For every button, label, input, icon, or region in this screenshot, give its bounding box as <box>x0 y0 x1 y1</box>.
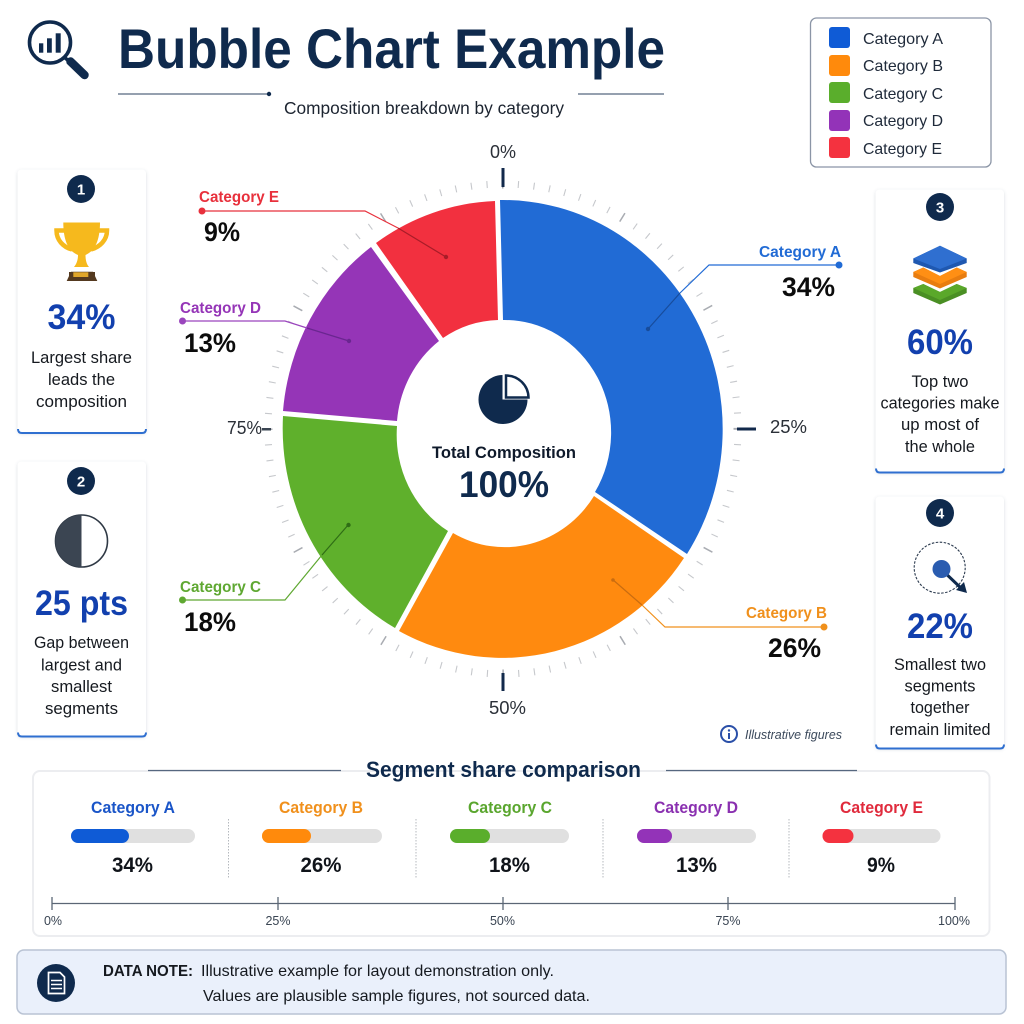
center label: 100% <box>459 464 549 505</box>
illustrative figures note: Illustrative figures <box>745 728 842 742</box>
stat 34%: 34% <box>48 298 116 337</box>
callout: category E <box>198 189 448 259</box>
panel: segment share comparison <box>33 757 990 936</box>
icon: target dot with arrow <box>914 542 967 593</box>
bar: category B: Category B <box>279 799 363 817</box>
callout: category A <box>646 244 842 331</box>
badge 1: 1 <box>77 182 85 198</box>
scale labels: 25% <box>770 417 807 437</box>
description: leads the <box>48 370 115 389</box>
legend: Category B <box>863 58 943 75</box>
description: segments <box>904 676 976 696</box>
description: segments <box>45 699 118 718</box>
segment E 9% <box>376 201 498 338</box>
heading: Segment share comparison <box>366 757 641 782</box>
bar: category E: Category E <box>840 799 923 817</box>
panel: card 1 largest share <box>18 170 146 433</box>
panel: card 4 smallest two <box>876 496 1004 748</box>
icon: document <box>37 964 75 1002</box>
description: categories make <box>880 394 1000 412</box>
callout: category D: Category D <box>180 300 261 317</box>
note text: DATA NOTE: <box>103 963 193 980</box>
orange layer <box>913 268 967 288</box>
bar: category D <box>637 799 756 877</box>
scale labels: 0% <box>490 142 516 162</box>
icon: half circle <box>56 515 108 567</box>
axis 0 to 100%: 25% <box>265 914 291 928</box>
axis 0 to 100% <box>44 897 970 928</box>
description <box>880 372 1000 456</box>
callout: category C <box>179 523 351 637</box>
icon: magnifier with bars <box>30 22 84 75</box>
stat 25 pts: 25 pts <box>35 584 128 623</box>
icon: stacked layers <box>913 246 967 304</box>
description: Smallest two <box>894 655 986 674</box>
icon: pie chart <box>478 375 528 424</box>
callout: category A: Category A <box>759 244 841 261</box>
bar: category E <box>822 799 940 877</box>
note text: Illustrative example for layout demonstration only. <box>201 963 554 980</box>
bar: category C <box>450 799 569 877</box>
subtitle: Composition breakdown by category <box>284 98 564 118</box>
axis 0 to 100%: 75% <box>715 914 741 928</box>
description <box>34 633 129 718</box>
scale labels: 75% <box>227 418 262 438</box>
badge 4: 4 <box>936 506 945 522</box>
callout: category C: Category C <box>180 579 261 596</box>
legend <box>810 18 991 167</box>
bar: category E: 9% <box>867 854 895 877</box>
legend: Category C <box>863 86 943 103</box>
description: the whole <box>905 437 975 456</box>
description: Largest share <box>31 348 132 367</box>
callout: category E: Category E <box>199 189 279 206</box>
segment C 18% <box>283 416 448 628</box>
description: composition <box>36 392 127 411</box>
description: up most of <box>901 415 979 434</box>
description: remain limited <box>890 720 990 739</box>
legend: Category E <box>863 141 942 158</box>
badge 1 <box>67 175 95 203</box>
green layer <box>913 284 967 304</box>
badge 2 <box>67 467 95 495</box>
bar: category A: 34% <box>112 854 153 877</box>
bar: category B: 26% <box>300 854 342 877</box>
panel: card 3 top two <box>876 190 1004 472</box>
description <box>890 655 990 739</box>
bar: category D: Category D <box>654 799 738 817</box>
bar: category D: 13% <box>676 854 717 877</box>
chart: gauge tick ring <box>262 168 756 691</box>
badge 4 <box>926 499 954 527</box>
icon: trophy <box>56 222 107 281</box>
axis 0 to 100%: 0% <box>44 914 62 928</box>
badge 3: 3 <box>936 200 944 216</box>
callout: category D: 13% <box>184 328 236 358</box>
description <box>31 348 132 411</box>
callout: category B: 26% <box>768 633 821 663</box>
badge 3 <box>926 193 954 221</box>
segment A 34% <box>500 200 723 554</box>
axis 0 to 100%: 100% <box>938 914 970 928</box>
title: Bubble Chart Example <box>118 17 665 80</box>
callout: category B: Category B <box>746 605 827 622</box>
chart: donut <box>283 200 723 658</box>
scale labels <box>227 142 807 718</box>
panel: data note <box>17 950 1006 1014</box>
legend: Category A <box>863 31 943 48</box>
bar: category A <box>71 799 195 877</box>
description: largest and <box>41 656 122 674</box>
bar: category C: 18% <box>489 854 530 877</box>
segment D 13% <box>283 247 439 421</box>
note text: Values are plausible sample figures, not sourced data. <box>203 988 590 1005</box>
center label <box>432 375 576 505</box>
callout: category D <box>179 300 351 358</box>
description: Gap between <box>34 633 129 652</box>
description: together <box>910 698 970 717</box>
callout: category E: 9% <box>204 217 240 247</box>
description: smallest <box>51 677 112 696</box>
bar: category C: Category C <box>468 799 552 817</box>
scale labels: 50% <box>489 698 526 718</box>
stat 60%: 60% <box>907 323 973 362</box>
legend: Category D <box>863 113 943 130</box>
segment B 26% <box>399 496 684 658</box>
blue layer <box>913 246 967 272</box>
badge 2: 2 <box>77 474 85 490</box>
axis 0 to 100%: 50% <box>490 914 515 928</box>
callout: category A: 34% <box>782 272 835 302</box>
description: Top two <box>912 372 968 391</box>
bar: category B <box>262 799 382 877</box>
callout: category C: 18% <box>184 607 236 637</box>
bar: category A: Category A <box>91 799 175 817</box>
panel: card 2 gap <box>18 462 146 736</box>
stat 22%: 22% <box>907 607 973 646</box>
center label: Total Composition <box>432 443 576 462</box>
callout: category B <box>611 578 828 663</box>
note text <box>103 963 590 1005</box>
